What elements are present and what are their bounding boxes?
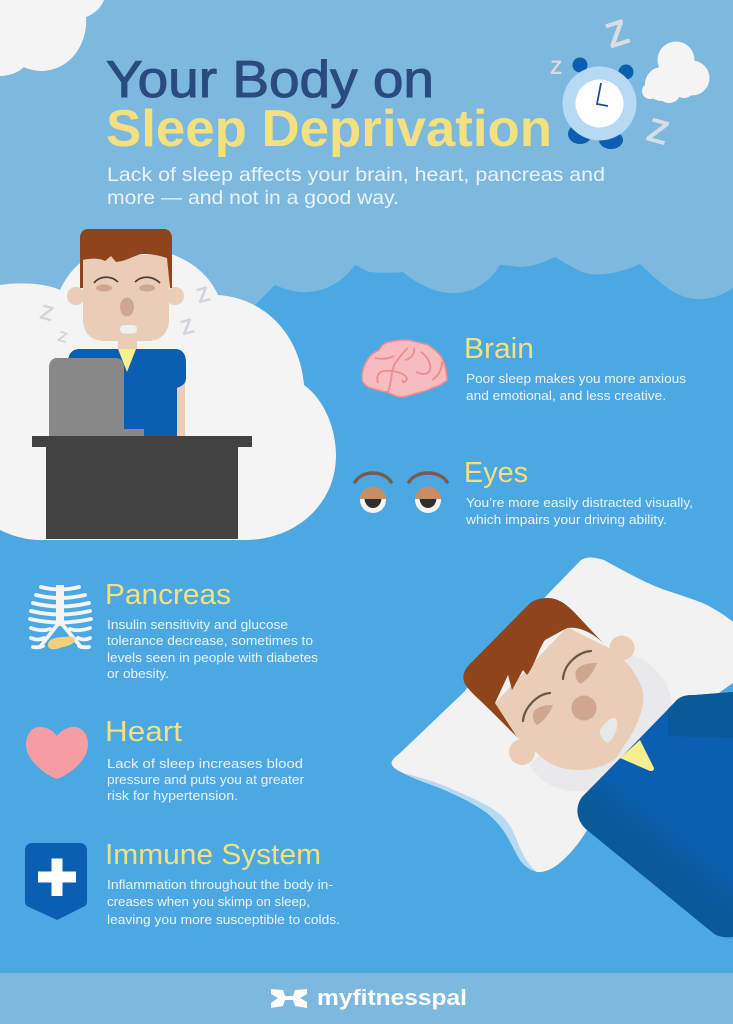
blanket shoulder shade (668, 692, 733, 738)
closed eyes (94, 277, 160, 292)
corner cloud (0, 0, 104, 76)
footer band (0, 973, 733, 1024)
section: immune system: Inflammation throughout the body in- (107, 878, 333, 892)
section: eyes (464, 457, 693, 527)
title (106, 51, 552, 158)
blanket (577, 692, 733, 937)
section: heart: Lack of sleep increases blood (107, 757, 303, 771)
title: Sleep Deprivation (106, 100, 552, 158)
section: brain (464, 333, 686, 403)
neck (118, 335, 137, 355)
section: heart: Heart (105, 716, 182, 748)
section: pancreas (105, 579, 318, 681)
footer logo: myfitnesspal (317, 985, 467, 1010)
mouth (120, 325, 137, 334)
closed eyes (523, 651, 597, 725)
title: Your Body on (106, 51, 434, 109)
snore letters: Z (56, 328, 69, 347)
ears (67, 287, 184, 305)
section: eyes: which impairs your driving ability. (465, 513, 667, 527)
collar (620, 740, 654, 771)
subtitle: more — and not in a good way. (107, 187, 399, 209)
icon: brain (362, 340, 447, 397)
section: brain: Brain (464, 333, 534, 365)
section: pancreas: or obesity. (107, 667, 169, 681)
section: brain: and emotional, and less creative. (466, 389, 666, 403)
face (495, 627, 643, 770)
pillow (392, 558, 733, 872)
icon: alarm clock with cloud: Z (550, 58, 562, 79)
section: immune system: creases when you skimp on sleep, (107, 895, 310, 909)
section: brain: Poor sleep makes you more anxious (466, 372, 686, 386)
pillow shadow (403, 773, 537, 872)
section: heart: risk for hypertension. (107, 789, 238, 803)
section: heart (105, 716, 304, 803)
collar (118, 349, 136, 372)
snore letters: Z (194, 283, 213, 308)
big white cloud (0, 247, 336, 540)
arm (176, 380, 185, 437)
section: pancreas: Insulin sensitivity and glucose (107, 618, 288, 632)
section: immune system (105, 839, 340, 927)
icon: alarm clock with cloud: Z (600, 11, 634, 56)
ears (509, 636, 634, 765)
subtitle: Lack of sleep affects your brain, heart, pancreas and (107, 164, 605, 186)
mouth (600, 718, 617, 743)
section: immune system: leaving you more susceptible to colds. (107, 913, 340, 927)
face (83, 255, 169, 341)
section: pancreas: Pancreas (105, 579, 231, 611)
section: pancreas: levels seen in people with diabetes (107, 651, 318, 665)
nose (572, 696, 596, 720)
snore letters: Z (178, 315, 197, 340)
man at desk (32, 229, 252, 539)
section: eyes: Eyes (464, 457, 528, 489)
icon: alarm clock with cloud (550, 11, 710, 153)
laptop (49, 358, 144, 436)
nose (120, 298, 134, 316)
section: heart: pressure and puts you at greater (107, 773, 304, 787)
section: pancreas: tolerance decrease, sometimes to (107, 634, 313, 648)
icon: alarm clock with cloud: Z (643, 111, 673, 153)
icon: shield (25, 843, 87, 920)
icon: eyes (355, 473, 447, 513)
section: immune system: Immune System (105, 839, 321, 871)
icon: ribcage (30, 585, 91, 649)
snore letters: Z (37, 301, 56, 326)
subtitle (107, 164, 605, 209)
icon: heart (26, 727, 88, 779)
snore letters (37, 283, 213, 347)
sleeping man (463, 598, 733, 937)
desk (32, 436, 252, 539)
hair (463, 598, 605, 737)
pillow dent (530, 655, 672, 791)
section: eyes: You’re more easily distracted visually, (466, 496, 693, 510)
shirt (68, 349, 186, 436)
hair (80, 229, 172, 288)
footer logo (271, 985, 467, 1010)
sky cloud band (0, 0, 733, 305)
